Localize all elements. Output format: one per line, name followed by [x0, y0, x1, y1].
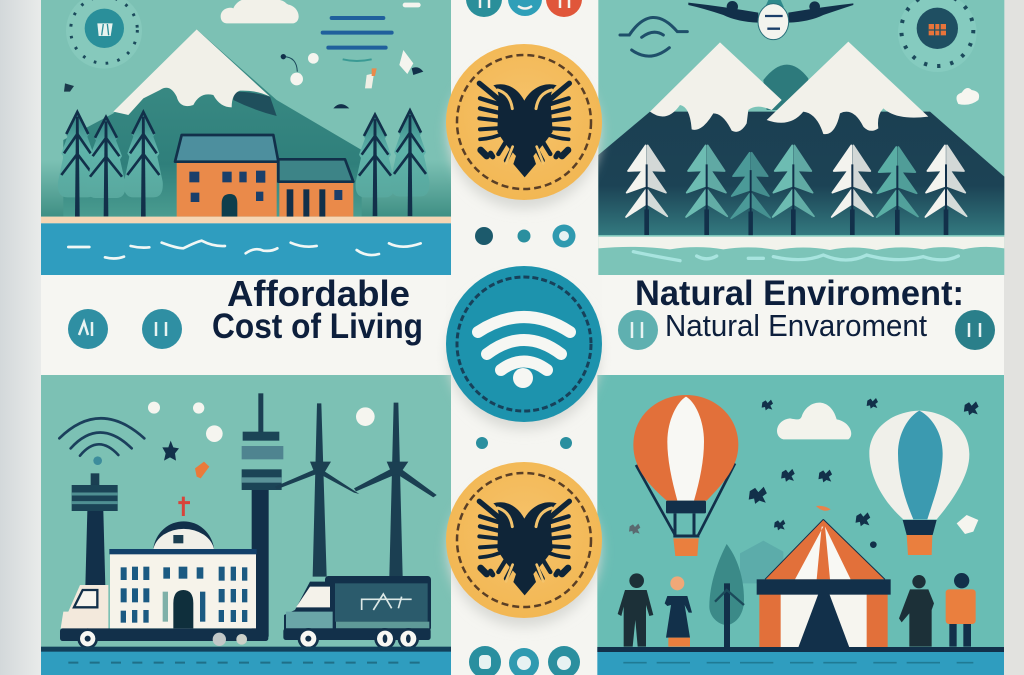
truck: left: [60, 585, 268, 648]
pine trees: [58, 108, 429, 217]
small dots row: [475, 224, 576, 248]
small cloud: [956, 88, 979, 105]
icon: top-left badge: [66, 0, 142, 69]
icon: airplane: [688, 0, 853, 40]
twin snow mountains: [598, 42, 1004, 235]
government building: [109, 497, 257, 628]
tree: [709, 544, 744, 648]
house: [175, 135, 353, 217]
panel: affordable mountain town: [41, 0, 451, 275]
cloud: [777, 403, 851, 439]
floating confetti: [629, 398, 979, 548]
heading: natural environment: [635, 274, 964, 343]
cloud: [221, 0, 299, 23]
small dots pair: [476, 437, 572, 449]
signal lines: [323, 18, 392, 61]
emblem coin: bottom: [446, 462, 602, 627]
floating decorations: [64, 5, 423, 108]
mountain: [63, 29, 362, 217]
band icons: [68, 309, 995, 350]
hot air balloon: orange: [633, 395, 738, 556]
icon: top-right badge: [898, 0, 977, 72]
panel: infrastructure and connectivity: [41, 375, 451, 675]
panel: natural environment mountains: [598, 0, 1004, 275]
wifi coin: [446, 266, 602, 430]
stars: [148, 402, 375, 478]
people: [618, 573, 976, 647]
circus tent: [757, 506, 891, 647]
tower: telecom right: [242, 393, 283, 637]
wind turbines: [275, 403, 437, 577]
heading: affordable cost of living: Cost of Living: [212, 307, 423, 346]
hot air balloon: blue: [869, 411, 969, 555]
snowy shore and water: [598, 237, 1004, 261]
top small icons: [466, 0, 582, 17]
panel: festivals and tourism: [597, 375, 1004, 675]
icon: wifi signal: [59, 418, 144, 465]
heading: affordable cost of living: [212, 273, 423, 346]
tower: telecom left: [72, 473, 118, 587]
heading: natural environment: Natural Enviroment:: [635, 274, 964, 313]
birds: [620, 17, 687, 56]
white text band: [41, 275, 1004, 375]
background hill: [740, 541, 783, 583]
bottom small icons: [469, 646, 580, 675]
beach and water: [41, 217, 451, 275]
emblem coin: top: [446, 44, 602, 209]
truck: right: [283, 576, 431, 648]
ground and water: [41, 647, 451, 675]
white sparkle decorations: [957, 515, 978, 534]
heading: natural environment: Natural Envaroment: [665, 308, 927, 343]
fir trees: [626, 145, 967, 235]
ground and water: [597, 647, 1004, 675]
heading: affordable cost of living: Affordable: [227, 273, 410, 314]
